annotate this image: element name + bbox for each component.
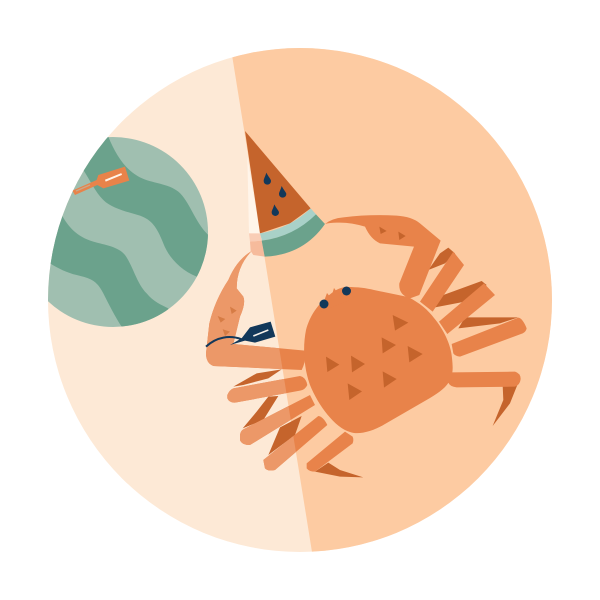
pale sliver left of slice <box>247 157 260 233</box>
peach rind left <box>250 241 265 257</box>
melon base <box>48 137 208 327</box>
dark rind <box>262 214 325 257</box>
crab legs, claws and shell <box>206 215 527 472</box>
whole watermelon <box>48 137 208 327</box>
crab <box>206 215 527 477</box>
crab dark leg tips right <box>428 248 518 426</box>
crab lower legs <box>227 376 353 472</box>
slice flesh <box>245 131 311 233</box>
watermelon slice <box>245 131 325 257</box>
melon dark stripes <box>50 137 208 326</box>
orange tag on watermelon <box>72 167 129 195</box>
crab eyes <box>320 286 351 308</box>
crab parts tinted on light section <box>206 252 296 470</box>
light rind <box>260 208 317 241</box>
right claw spots <box>379 227 406 240</box>
seeds <box>264 173 286 216</box>
crab body shell <box>304 287 453 433</box>
crab right claw arm <box>325 215 441 298</box>
crab left claw arm <box>206 251 305 370</box>
crab right legs <box>420 252 527 387</box>
left claw spots <box>218 307 237 336</box>
shell spots <box>326 315 423 400</box>
panel: light background circle <box>40 40 560 560</box>
illustration: crab and watermelon badge <box>48 48 552 552</box>
eye spikes <box>324 288 336 300</box>
crab dark leg tips lower left <box>233 369 363 477</box>
panel: darker peach right section <box>232 48 552 552</box>
navy luggage tag on claw <box>206 322 275 347</box>
pale rind left <box>249 233 262 242</box>
